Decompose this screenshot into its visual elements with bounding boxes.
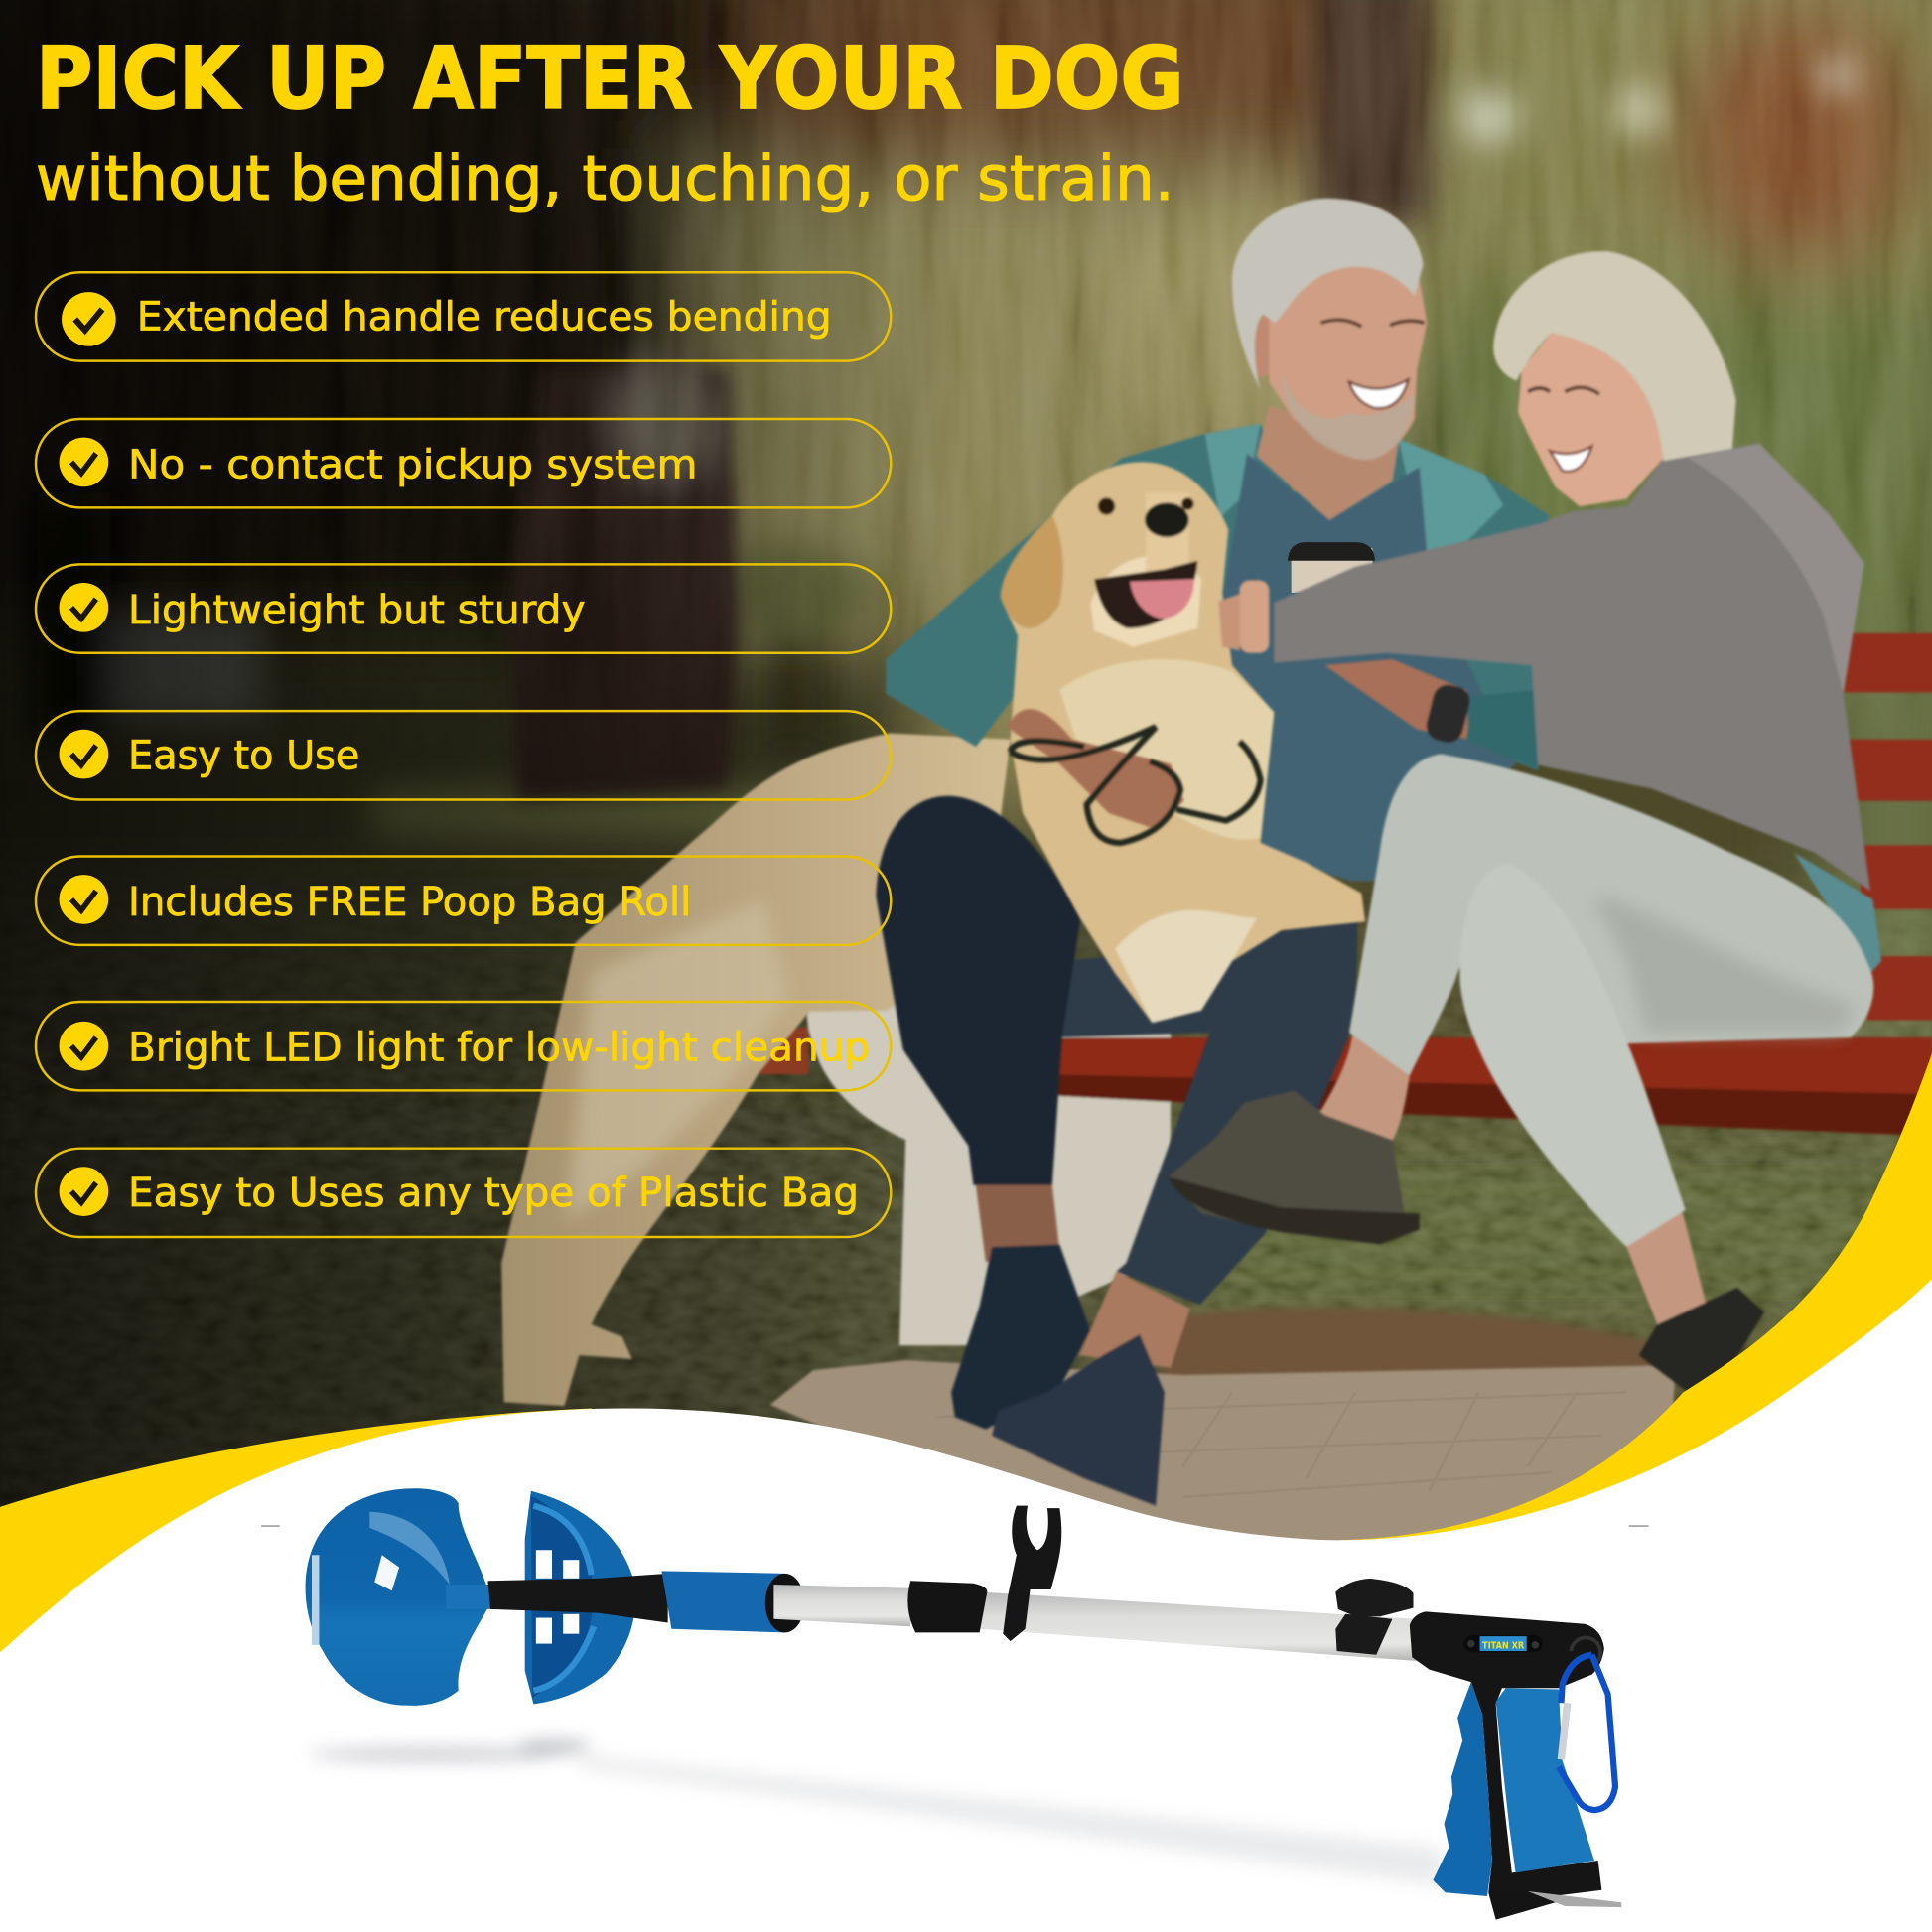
man hair <box>1232 199 1423 390</box>
feature pill: lightweight <box>36 564 891 653</box>
title: PICK UP AFTER YOUR DOG <box>36 29 1184 129</box>
yellow swoosh right <box>1337 1053 1932 1540</box>
knob and collar <box>1335 1579 1414 1655</box>
hand on dog <box>1007 709 1184 828</box>
black collar <box>907 1581 987 1632</box>
hand with watch <box>1324 659 1468 740</box>
leash <box>1011 727 1261 843</box>
concrete support <box>806 924 1171 1345</box>
scoop right half <box>525 1491 635 1704</box>
check icon <box>60 1022 108 1070</box>
feature pill: no contact: No - contact pickup system <box>128 443 697 488</box>
feature pill: led light: Bright LED light for low-light cleanup <box>128 1026 870 1071</box>
dirt patch <box>1159 1308 1676 1386</box>
dog head and chest <box>1001 462 1365 1023</box>
product: pooper scooper <box>306 1488 1621 1920</box>
handle ring <box>1571 1638 1600 1663</box>
woman hair <box>1493 251 1736 461</box>
man mouth <box>1349 379 1409 408</box>
check icon <box>60 730 108 778</box>
man right shoe <box>992 1334 1165 1506</box>
wrist skin <box>1218 594 1240 650</box>
product shadow <box>308 1741 1442 1885</box>
feature pill: easy to use: Easy to Use <box>128 733 359 778</box>
feature pill: any plastic bag: Easy to Uses any type of Plastic Bag <box>128 1171 859 1216</box>
bench back slats <box>1836 633 1932 1021</box>
feature pill: lightweight: Lightweight but sturdy <box>128 588 586 633</box>
tree trunk <box>507 369 740 801</box>
man <box>876 199 1549 1506</box>
paving stones path <box>770 1360 1676 1553</box>
man beard <box>1282 369 1415 460</box>
handle body <box>1410 1611 1604 1900</box>
dog eyes <box>1098 497 1115 515</box>
bench <box>759 633 1932 1345</box>
woman back shoe <box>1639 1288 1764 1392</box>
coffee cup <box>1288 542 1375 593</box>
black ring <box>765 1574 804 1632</box>
small dashes <box>261 1525 1649 1527</box>
feature pill: extended handle <box>36 272 891 361</box>
woman eyes <box>1528 387 1599 394</box>
man neck <box>1257 407 1399 520</box>
man left shoe <box>951 1244 1090 1430</box>
man ear <box>1244 303 1279 377</box>
woman <box>1169 251 1881 1392</box>
woman front leg and hip <box>1349 755 1873 1075</box>
man left pant leg <box>876 796 1080 1185</box>
man jacket <box>886 424 1549 770</box>
man right ankle <box>1079 1272 1190 1368</box>
smartwatch <box>1424 681 1473 746</box>
teal shirt hem <box>1794 853 1881 973</box>
man right pant leg <box>1053 918 1358 1305</box>
grip back <box>1433 1682 1492 1896</box>
feature pill: led light <box>36 1002 891 1090</box>
woman jacket <box>1274 444 1870 891</box>
man left ankle <box>976 1185 1061 1262</box>
dog nose <box>1145 502 1189 537</box>
blue sleeve <box>661 1571 785 1632</box>
man eyes <box>1320 320 1425 327</box>
silver tube <box>773 1585 910 1626</box>
feature pill: free bag roll: Includes FREE Poop Bag Roll <box>128 880 691 925</box>
clip <box>1003 1506 1061 1641</box>
brand badge: TITAN XR <box>1482 1641 1525 1652</box>
dog ear <box>1001 515 1063 628</box>
yellow swoosh left <box>0 1409 617 1725</box>
woman ankles <box>1318 1033 1707 1324</box>
check icon <box>60 438 108 486</box>
check icon <box>60 875 108 924</box>
foot <box>1488 1891 1573 1920</box>
black shaft <box>487 1574 668 1622</box>
woman mouth <box>1550 446 1591 472</box>
grip front <box>1496 1688 1594 1872</box>
brand badge <box>1463 1635 1543 1652</box>
main white tube <box>980 1591 1417 1661</box>
feature pill: free bag roll <box>36 857 891 945</box>
scoop left half <box>306 1488 487 1706</box>
woman back leg <box>1459 864 1686 1247</box>
feature pill: any plastic bag <box>36 1149 891 1237</box>
scoop bracket <box>446 1585 500 1609</box>
carabiner <box>1559 1655 1615 1810</box>
bench end <box>759 1028 808 1074</box>
dog body <box>501 733 1011 1406</box>
woman hood <box>1688 444 1864 694</box>
subtitle: without bending, touching, or strain. <box>36 142 1174 214</box>
man face <box>1269 255 1427 460</box>
sleeve cuff <box>1466 690 1538 770</box>
dog chest fur <box>1059 659 1274 840</box>
dog snout <box>1146 492 1189 573</box>
man shirt <box>1220 454 1516 881</box>
woman neck and face <box>1518 333 1663 506</box>
feature pill: no contact <box>36 419 891 507</box>
white wave base <box>0 1279 1932 1932</box>
wrist band <box>1240 581 1269 653</box>
check icon <box>60 583 108 632</box>
check icon <box>62 292 116 346</box>
dog mouth and tongue <box>1094 561 1197 628</box>
man arms and hands <box>1007 659 1538 843</box>
woman front shoe <box>1169 1090 1420 1244</box>
feature pill: extended handle: Extended handle reduces bending <box>137 295 832 341</box>
bench seat <box>1047 1037 1932 1136</box>
feature pill: easy to use <box>36 711 891 799</box>
dog muzzle <box>1090 556 1201 647</box>
check icon <box>60 1167 108 1216</box>
photo background: blurred park <box>0 0 1932 1507</box>
